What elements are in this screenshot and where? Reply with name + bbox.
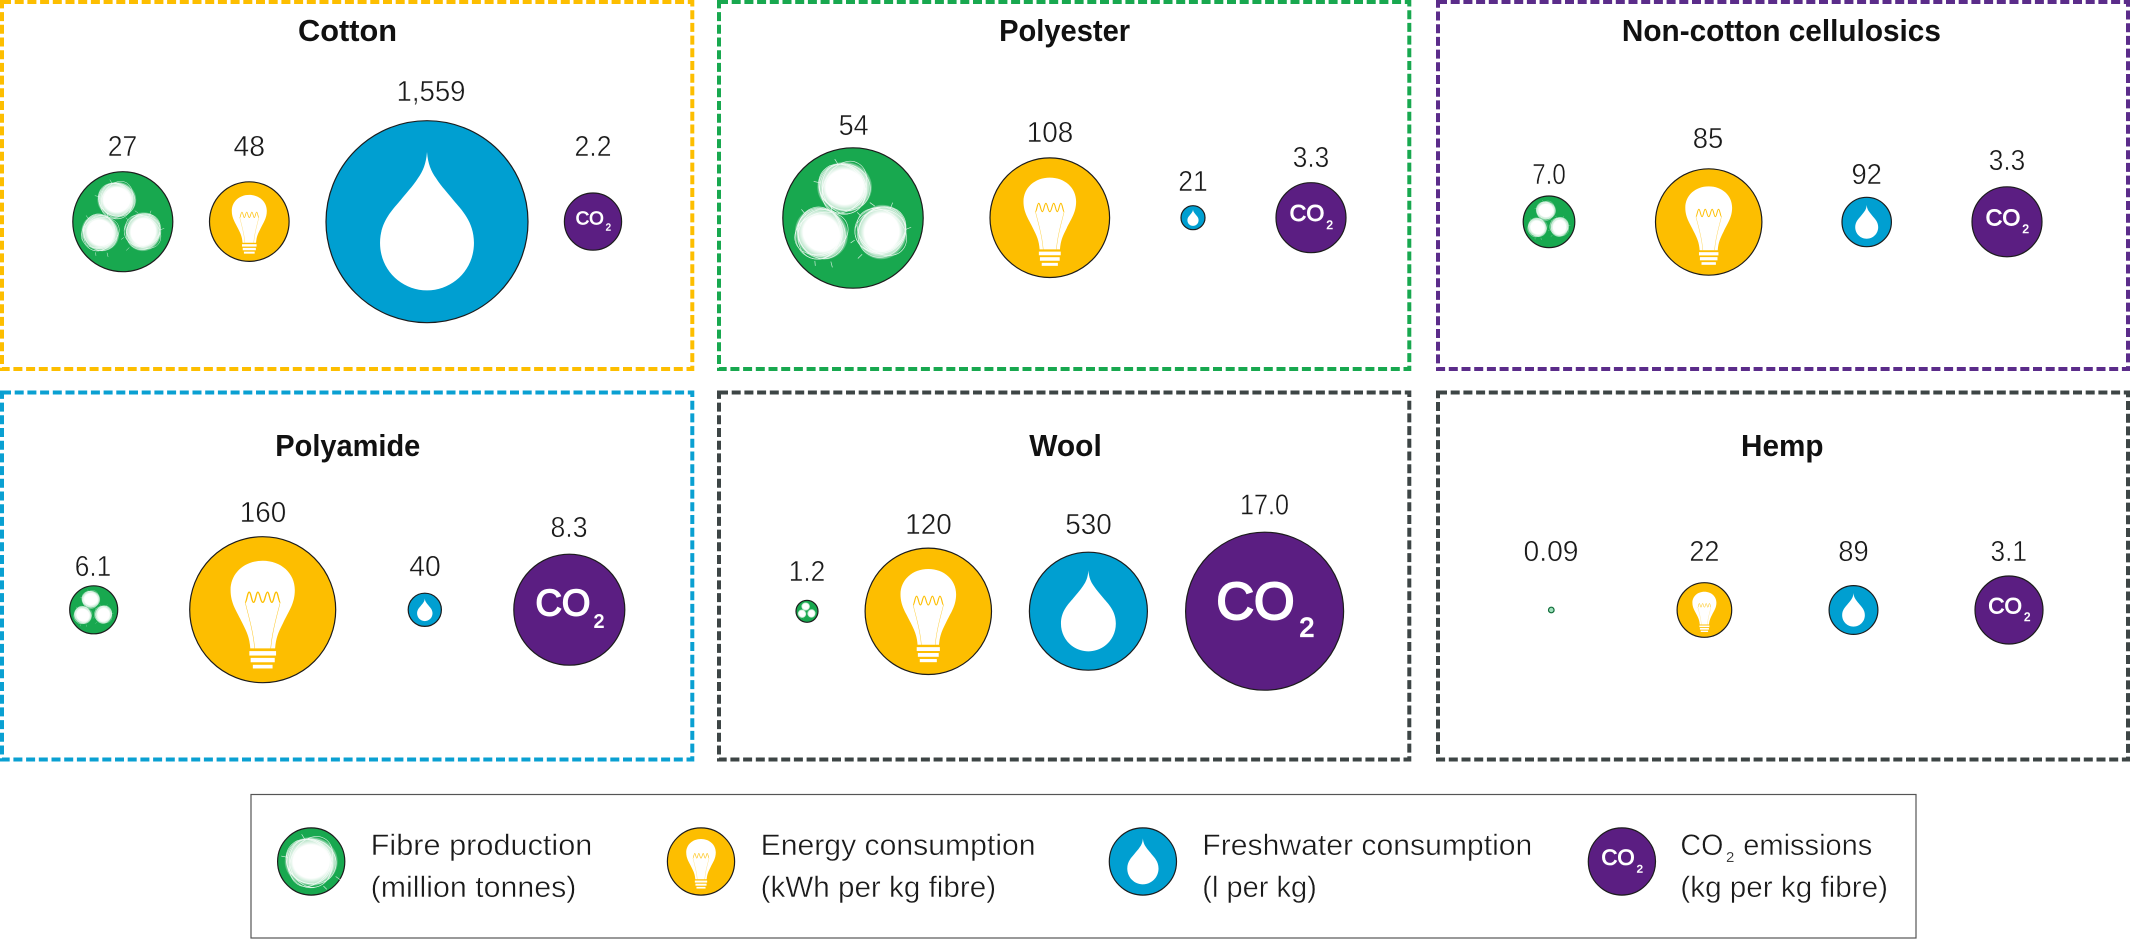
panel: Cotton [2, 2, 692, 369]
legend text: CO2 emissions: emissions [1743, 829, 1872, 862]
heading: Polyester: Polyester [999, 13, 1130, 48]
heading: Non-cotton cellulosics: Non-cotton cellulosics [1622, 13, 1941, 48]
icon: energy bulb [990, 158, 1110, 278]
value: energy 22: 22 [1689, 536, 1719, 568]
value: freshwater 1,559: 1,559 [396, 76, 466, 108]
legend icon: CO2: 2 [1637, 863, 1643, 875]
panel: Non-cotton cellulosics [1438, 2, 2128, 369]
value: CO2 3.3: 3.3 [1989, 145, 2025, 177]
legend text: CO2 emissions: 2 [1726, 849, 1734, 866]
icon: energy bulb [1677, 583, 1732, 637]
icon: CO2: CO [1216, 573, 1295, 631]
value: energy 108: 108 [1027, 117, 1073, 149]
value: CO2 3.3: 3.3 [1293, 142, 1329, 174]
icon: water drop [326, 121, 528, 323]
value: freshwater 530: 530 [1065, 509, 1112, 541]
value: CO2 3.1: 3.1 [1991, 536, 2027, 568]
value: freshwater 92: 92 [1851, 159, 1882, 191]
value: fibre production 1.2: 1.2 [789, 556, 825, 588]
icon: fibre production [773, 148, 923, 288]
icon: CO2 [1972, 187, 2042, 257]
icon: fibre production [1548, 607, 1554, 613]
legend text: CO2 emissions: (kg per kg fibre) [1680, 871, 1888, 904]
panel: Wool [719, 392, 1409, 760]
legend text: energy: (kWh per kg fibre) [761, 871, 996, 904]
heading: Hemp: Hemp [1741, 428, 1824, 463]
icon: CO2 [1276, 183, 1346, 253]
legend [251, 794, 1916, 938]
value: freshwater 89: 89 [1838, 536, 1869, 568]
legend text: freshwater [1202, 829, 1532, 904]
legend icon: fibre production [277, 828, 345, 895]
icon: water drop [1829, 586, 1878, 634]
icon: energy bulb [210, 182, 289, 261]
legend text: fibre production [371, 829, 592, 904]
value: fibre production 7.0: 7.0 [1532, 159, 1566, 191]
value: energy 85: 85 [1693, 123, 1723, 155]
icon: CO2: 2 [2024, 612, 2030, 624]
icon: CO2: 2 [594, 610, 604, 631]
icon: CO2: CO [1988, 593, 2022, 618]
icon: CO2: CO [576, 207, 604, 228]
icon: CO2: 2 [1326, 218, 1333, 232]
legend text: fibre production: Fibre production [371, 829, 592, 862]
icon: fibre production [794, 600, 818, 622]
icon: fibre production [1519, 196, 1575, 248]
icon: CO2 [1975, 576, 2043, 644]
legend text: energy [761, 829, 1036, 904]
icon: CO2: CO [535, 582, 590, 623]
heading: Wool: Wool [1029, 428, 1102, 463]
value: fibre production 0.09: 0.09 [1524, 536, 1578, 568]
icon: CO2: 2 [606, 223, 611, 234]
icon: CO2 [564, 193, 622, 250]
panel: Polyamide [2, 392, 692, 760]
icon: CO2: 2 [2022, 222, 2029, 236]
legend text: CO2 emissions [1680, 829, 1888, 904]
value: energy 120: 120 [905, 509, 952, 541]
value: fibre production 6.1: 6.1 [75, 551, 111, 583]
value: CO2 8.3: 8.3 [550, 512, 588, 544]
icon: CO2 [1186, 532, 1344, 690]
value: freshwater 21: 21 [1178, 166, 1208, 198]
icon: fibre production [66, 172, 173, 272]
value: energy 160: 160 [240, 497, 286, 529]
value: energy 48: 48 [234, 131, 265, 163]
icon: CO2 [514, 554, 625, 665]
legend text: freshwater: (l per kg) [1202, 871, 1317, 904]
legend icon: energy [667, 828, 735, 895]
legend text: energy: Energy consumption [761, 829, 1036, 862]
icon: water drop [1029, 552, 1147, 670]
icon: energy bulb [865, 548, 992, 674]
icon: water drop [408, 593, 441, 626]
legend icon: CO2: CO [1601, 845, 1635, 870]
value: freshwater 40: 40 [409, 551, 441, 583]
legend icon: CO2 [1588, 828, 1656, 895]
icon: water drop [1842, 197, 1891, 247]
panel: Polyester [719, 2, 1409, 369]
icon: water drop [1181, 206, 1205, 230]
legend text: fibre production: (million tonnes) [371, 871, 576, 904]
icon: energy bulb [190, 537, 336, 683]
icon: fibre production [66, 586, 118, 634]
icon: CO2: 2 [1299, 612, 1314, 642]
icon: CO2: CO [1290, 200, 1324, 226]
value: fibre production 54: 54 [839, 110, 869, 142]
icon: energy bulb [1656, 169, 1762, 275]
icon: CO2: CO [1986, 204, 2020, 230]
value: CO2 2.2: 2.2 [574, 131, 612, 163]
legend text: CO2 emissions: CO [1680, 829, 1723, 862]
legend text: freshwater: Freshwater consumption [1202, 829, 1532, 862]
panel: Hemp [1438, 392, 2128, 760]
heading: Cotton: Cotton [298, 13, 397, 48]
value: CO2 17.0: 17.0 [1240, 490, 1289, 522]
heading: Polyamide: Polyamide [275, 428, 420, 463]
value: fibre production 27: 27 [108, 131, 137, 163]
legend icon: freshwater [1109, 828, 1176, 895]
